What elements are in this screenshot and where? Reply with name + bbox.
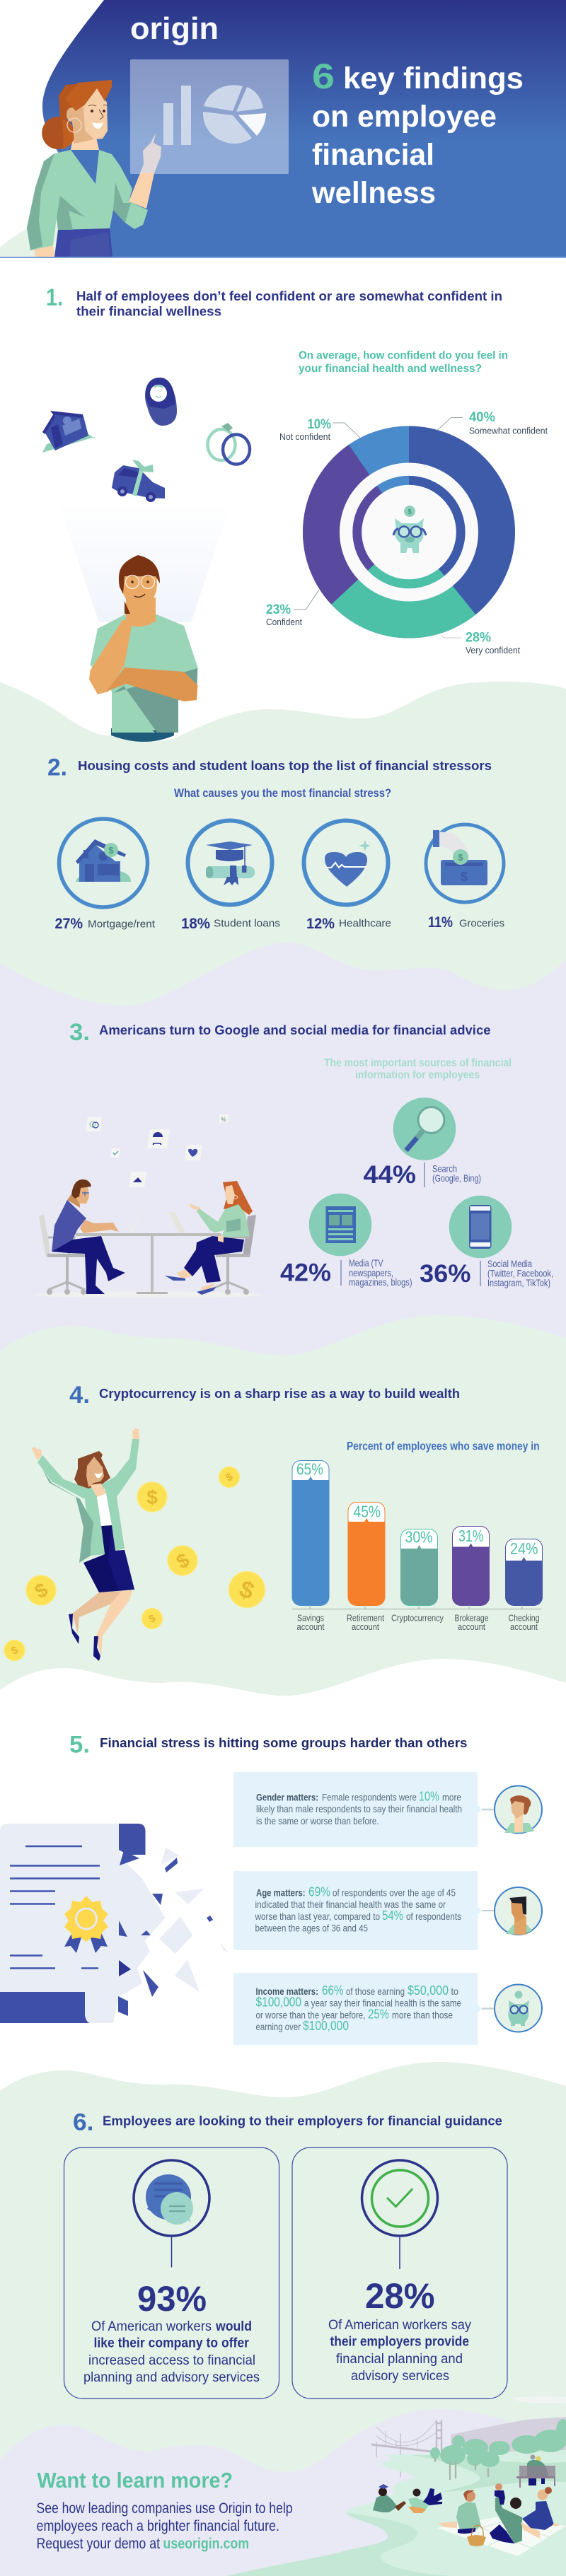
icon: car with bow xyxy=(112,460,165,502)
panel: income matters: to xyxy=(451,1986,458,1997)
heading 2 xyxy=(47,754,492,781)
panel: income matters: $50,000 xyxy=(408,1983,449,1998)
light shards xyxy=(159,1848,229,1992)
cta heading: Want to learn more? xyxy=(37,2468,233,2493)
label: 28%: Very confident xyxy=(466,645,520,655)
heading 4 xyxy=(69,1382,460,1409)
left laptop screen xyxy=(129,1211,142,1233)
heading 6 xyxy=(73,2109,502,2135)
illustration: shattering certificate xyxy=(0,1824,229,2023)
heading 3: Americans turn to Google and social media for financial advice xyxy=(99,1023,491,1037)
axis labels: account xyxy=(458,1621,485,1632)
stat: mortgage xyxy=(55,819,156,932)
icon: graduation cap xyxy=(206,841,255,885)
label: 23%: 23% xyxy=(266,602,291,617)
section 5 xyxy=(0,1731,542,2045)
label: 10% xyxy=(279,417,360,442)
bar: cryptocurrency: 30% xyxy=(405,1527,433,1546)
donut chart xyxy=(266,410,548,655)
heading 4: Cryptocurrency is on a sharp rise as a way to build wealth xyxy=(99,1387,460,1401)
icon: baby xyxy=(145,378,177,426)
card: 28%: 28% xyxy=(365,2276,434,2316)
illustration: two people at a table xyxy=(34,1114,263,1298)
card: 28% xyxy=(292,2147,507,2399)
stat: search: Search xyxy=(432,1164,457,1174)
panel: age matters: of respondents over the age of 45 xyxy=(333,1887,456,1898)
icon: wallet and hand: $ xyxy=(458,852,463,863)
stat: social media: (Twitter, Facebook, xyxy=(487,1269,553,1278)
icon: heart xyxy=(325,840,371,887)
stat: media: 42% xyxy=(280,1259,331,1287)
card: 28%: advisory services xyxy=(351,2368,449,2384)
stat: media: Media (TV xyxy=(349,1258,383,1269)
label: 40% xyxy=(437,410,548,436)
stat: healthcare: Healthcare xyxy=(339,918,391,929)
stat: social media: 36% xyxy=(420,1260,471,1288)
stat: groceries: Groceries xyxy=(459,918,504,929)
icon: house xyxy=(42,411,95,453)
dark shards xyxy=(118,1848,213,2016)
chart question xyxy=(299,349,508,375)
icon: check xyxy=(372,2170,429,2227)
section 6 xyxy=(64,2109,507,2399)
panel: age matters xyxy=(233,1871,478,1950)
hill xyxy=(227,2450,566,2576)
label: 10%: 10% xyxy=(307,417,331,432)
panel: income matters: of those earning xyxy=(346,1986,405,1997)
stat: healthcare: 12% xyxy=(306,916,335,932)
card: 93%: would xyxy=(215,2319,252,2334)
question 2: What causes you the most financial stress? xyxy=(174,786,391,800)
coin symbols: $ xyxy=(31,1578,52,1603)
axis labels xyxy=(297,1612,539,1632)
icon: magnifier xyxy=(406,1107,444,1150)
section 3 xyxy=(34,1019,553,1298)
group of friends xyxy=(373,2484,442,2513)
icon: speech bubbles xyxy=(146,2174,193,2225)
avatar: piggy bank xyxy=(478,1984,542,2032)
coin symbols: $ xyxy=(146,1486,158,1508)
bar: checking xyxy=(505,1539,543,1605)
label: 28%: 28% xyxy=(466,631,491,645)
city skyline xyxy=(451,2417,566,2457)
panel: income matters xyxy=(233,1973,478,2045)
card: 93%: like their company to offer xyxy=(93,2335,249,2350)
axis labels: account xyxy=(297,1621,325,1632)
stat: student loans xyxy=(181,820,280,932)
card: 93% xyxy=(64,2147,279,2399)
floating cards xyxy=(86,1114,229,1187)
section 4 xyxy=(4,1382,543,1661)
stat: groceries xyxy=(426,824,504,931)
illustration: park scene xyxy=(227,2396,566,2576)
section 1 xyxy=(42,284,548,742)
family on blanket xyxy=(438,2483,559,2546)
chart question: On average, how confident do you feel in xyxy=(299,349,508,362)
floating cards: % xyxy=(221,1117,226,1123)
stat: student loans: 18% xyxy=(181,916,210,932)
stat: search xyxy=(364,1097,481,1189)
bar chart xyxy=(291,1440,543,1632)
heading 2: Housing costs and student loans top the list of financial stressors xyxy=(78,759,492,773)
man with laptop xyxy=(39,1179,125,1295)
text lines xyxy=(10,1846,100,1969)
bar: savings xyxy=(292,1459,329,1605)
panel: income matters: or worse than the year before, xyxy=(256,2010,365,2021)
stat: social media: Instagram, TikTok) xyxy=(487,1278,550,1288)
bar: checking: 24% xyxy=(510,1539,538,1558)
card: 28%: Of American workers say xyxy=(328,2317,471,2333)
stat: healthcare xyxy=(304,820,391,932)
panel: age matters: of respondents xyxy=(406,1911,461,1922)
icon: phone xyxy=(469,1205,491,1249)
bar: cryptocurrency xyxy=(400,1527,438,1605)
heading 6: Employees are looking to their employers for financial guidance xyxy=(103,2114,502,2128)
axis labels: Savings xyxy=(297,1612,324,1624)
heading 6: 6. xyxy=(73,2109,93,2135)
panel: hero banner xyxy=(0,0,566,258)
heading 3: 3. xyxy=(69,1019,90,1046)
illustration: woman jumping xyxy=(32,1428,139,1661)
panel: income matters: earning over xyxy=(256,2021,301,2032)
table xyxy=(76,1233,221,1294)
panel: income matters: $100,000 xyxy=(303,2019,349,2033)
axis labels: Cryptocurrency xyxy=(391,1612,444,1624)
label: 10%: Not confident xyxy=(279,431,330,442)
axis labels: Retirement xyxy=(347,1612,384,1624)
basket xyxy=(467,2525,486,2546)
icon: wallet and hand: $ xyxy=(461,870,468,884)
chart panel xyxy=(130,59,289,174)
bar: retirement xyxy=(348,1502,385,1605)
panel: gender matters: more xyxy=(442,1792,461,1803)
card: 28%: financial planning and xyxy=(336,2351,463,2367)
chart question: your financial health and wellness? xyxy=(299,363,482,375)
bar: brokerage: 31% xyxy=(458,1527,484,1545)
heading 5: 5. xyxy=(69,1731,90,1758)
stat: social media: Social Media xyxy=(487,1259,532,1269)
heading 4: 4. xyxy=(69,1382,90,1409)
panel: age matters: 54% xyxy=(382,1908,403,1923)
stat: search: 44% xyxy=(364,1161,416,1189)
axis labels: Brokerage xyxy=(454,1612,488,1624)
heading 2: 2. xyxy=(47,754,67,781)
icon: piggy bank: $ xyxy=(408,508,412,516)
chart subtitle: information for employees xyxy=(355,1069,480,1081)
label: 28% xyxy=(441,631,520,655)
heading 5 xyxy=(69,1731,467,1758)
coin symbols: $ xyxy=(9,1644,21,1657)
title: financial xyxy=(312,138,434,172)
panel: gender matters: likely than male respondents to say their financial health xyxy=(256,1803,462,1814)
panel: income matters: more than those xyxy=(392,2010,453,2021)
label: 23% xyxy=(266,590,319,627)
heading 1 xyxy=(46,284,502,318)
chart subtitle xyxy=(324,1057,512,1081)
stat: media xyxy=(280,1194,412,1288)
heading 5: Financial stress is hitting some groups harder than others xyxy=(100,1736,467,1750)
label: 23%: Confident xyxy=(266,617,302,627)
title: key findings xyxy=(343,62,524,95)
card: 93%: 93% xyxy=(137,2279,207,2319)
cta text: useorigin.com xyxy=(163,2536,249,2552)
stat: search: (Google, Bing) xyxy=(432,1173,481,1184)
card: 93%: increased access to financial xyxy=(88,2353,255,2368)
blanket xyxy=(437,2517,566,2556)
panel: gender matters: is the same or worse than before. xyxy=(256,1815,379,1826)
panel: income matters: 66% xyxy=(322,1983,344,1998)
rosette seal xyxy=(64,1896,108,1953)
panel: gender matters: Female respondents were xyxy=(322,1792,417,1803)
label: 40%: Somewhat confident xyxy=(469,426,548,436)
stat: student loans: Student loans xyxy=(214,918,280,929)
card: 93%: Of American workers xyxy=(91,2319,212,2334)
stat: social media xyxy=(420,1196,553,1288)
icon: rings xyxy=(208,423,250,464)
axis xyxy=(291,1605,541,1609)
coin symbols: $ xyxy=(236,1575,258,1605)
bar: retirement: 45% xyxy=(354,1502,381,1520)
panel: gender matters: 10% xyxy=(419,1789,439,1803)
illustration: thinking man xyxy=(89,555,198,742)
icon: wallet and hand xyxy=(433,830,487,885)
hill shadow bands xyxy=(227,2512,453,2576)
coin symbols: $ xyxy=(224,1471,236,1484)
title: 6 xyxy=(312,57,335,96)
label: 40%: 40% xyxy=(469,410,495,425)
bridge xyxy=(371,2420,441,2477)
coin symbols: $ xyxy=(173,1549,193,1573)
stat: mortgage: 27% xyxy=(55,916,83,932)
heading 3 xyxy=(69,1019,491,1046)
title: on employee xyxy=(312,100,497,134)
panel: income matters: Income matters: xyxy=(256,1986,318,1997)
icon: newspaper xyxy=(325,1206,356,1243)
chart subtitle: The most important sources of financial xyxy=(324,1057,512,1069)
section: call to action xyxy=(37,2396,566,2576)
certificate paper xyxy=(0,1824,166,2023)
coins xyxy=(4,1467,265,1660)
card: 28%: their employers provide xyxy=(330,2333,469,2349)
card: 93%: planning and advisory services xyxy=(83,2370,260,2385)
stat: mortgage: Mortgage/rent xyxy=(88,918,156,931)
panel: age matters: worse than last year, compared to xyxy=(255,1911,380,1922)
panel: gender matters xyxy=(233,1772,478,1847)
avatar: woman xyxy=(478,1786,542,1833)
woman with laptop xyxy=(165,1181,256,1295)
bar: brokerage xyxy=(452,1526,490,1605)
panel: income matters: a year say their financial health is the same xyxy=(304,1997,461,2008)
stat: media: magazines, blogs) xyxy=(349,1277,412,1288)
panel: income matters: $100,000 xyxy=(256,1995,301,2010)
cta text xyxy=(37,2500,293,2552)
spotlight xyxy=(58,502,231,622)
icon: house with coin: $ xyxy=(108,845,114,856)
stat: media: newspapers, xyxy=(349,1268,393,1278)
illustration: woman pointing xyxy=(27,80,161,257)
cta text: employees reach a brighter financial future. xyxy=(37,2518,279,2534)
logo: origin: origin xyxy=(130,11,219,46)
title: wellness xyxy=(311,176,436,210)
stat: groceries: 11% xyxy=(428,914,453,931)
coin symbols xyxy=(9,1471,258,1657)
axis labels: Checking xyxy=(508,1612,539,1624)
heading 1: their financial wellness xyxy=(76,304,221,318)
panel: age matters: between the ages of 36 and 45 xyxy=(255,1922,368,1933)
icon: piggy bank xyxy=(393,506,426,553)
cta text: Request your demo at xyxy=(37,2536,160,2552)
cta text: See how leading companies use Origin to help xyxy=(37,2500,293,2517)
icon: house with coin xyxy=(76,839,131,882)
axis labels: account xyxy=(352,1621,379,1632)
panel: age matters: indicated that their financial health was the same or xyxy=(255,1899,446,1910)
panel: income matters: 25% xyxy=(368,2007,389,2021)
trees xyxy=(430,2419,566,2467)
section 2 xyxy=(47,754,504,932)
coin symbols: $ xyxy=(146,1612,158,1626)
avatar: man xyxy=(478,1887,542,1935)
axis labels: account xyxy=(510,1621,538,1632)
bar: savings: 65% xyxy=(296,1459,323,1478)
bench with couple xyxy=(516,2455,555,2488)
panel: age matters: 69% xyxy=(308,1885,330,1899)
heading 1: 1. xyxy=(46,284,63,311)
panel: age matters: Age matters: xyxy=(256,1887,306,1898)
panel: gender matters: Gender matters: xyxy=(256,1792,318,1803)
title xyxy=(311,57,524,210)
heading 1: Half of employees don’t feel confident or are somewhat confident in xyxy=(76,289,502,303)
